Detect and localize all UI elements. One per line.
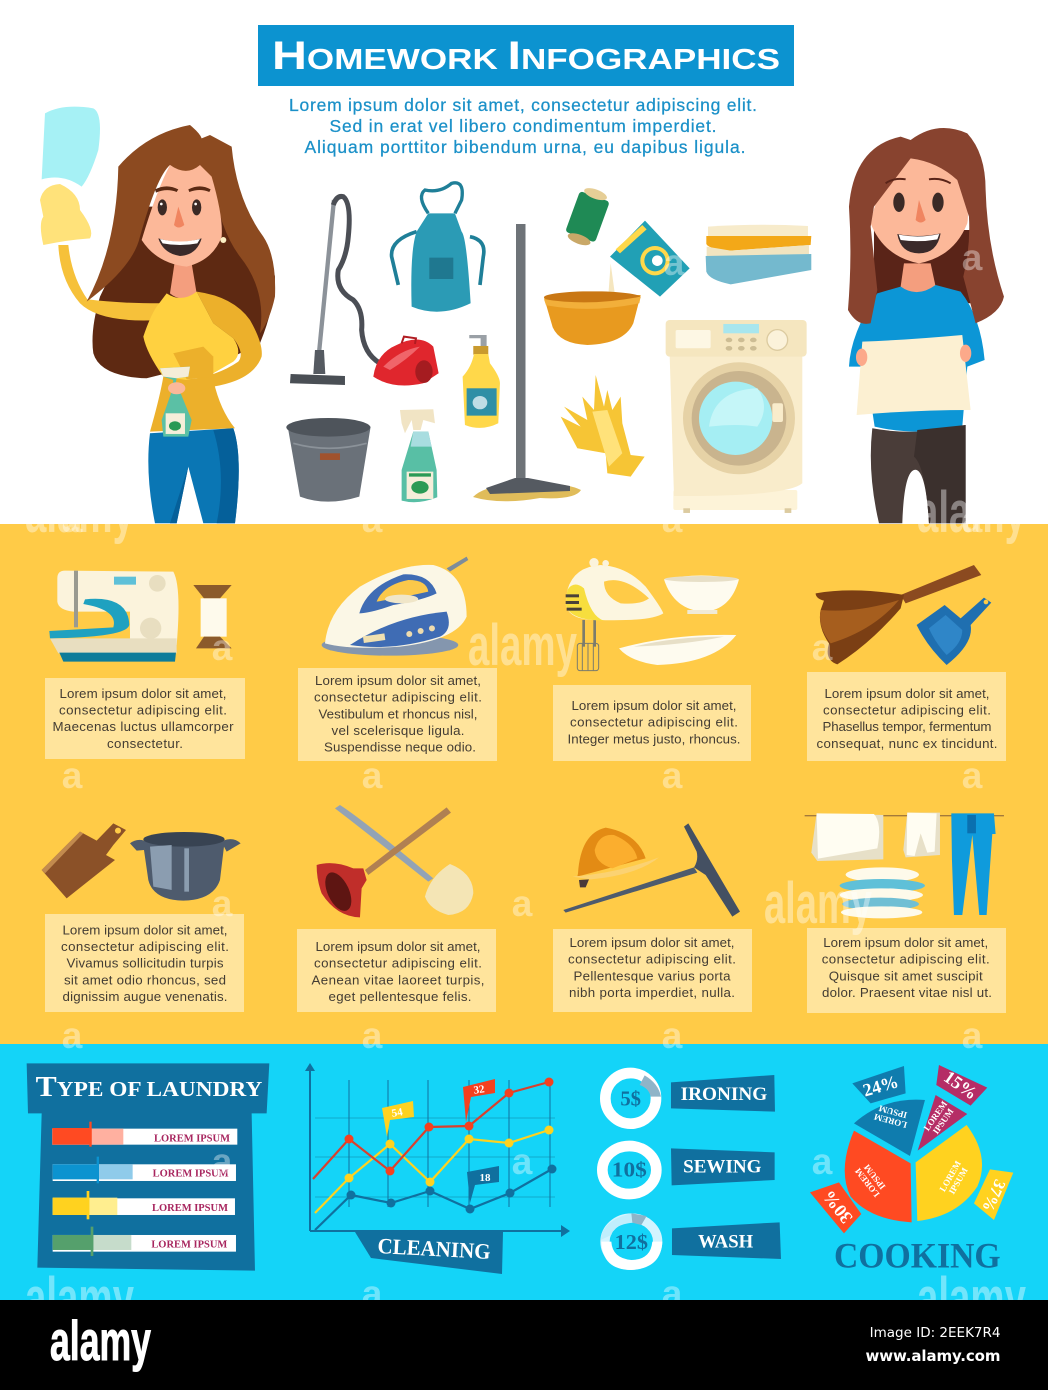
text box: ironing — [298, 668, 497, 761]
watermarks: a — [212, 627, 233, 668]
watermarks: a — [962, 755, 983, 796]
flag: 18: 18 — [480, 1172, 491, 1184]
chart: cooking pie — [810, 1065, 1013, 1276]
text box: ironing: Vestibulum et rhoncus nisl, — [318, 706, 478, 721]
text box: plumbing: Lorem ipsum dolor sit amet, — [316, 939, 480, 954]
watermarks: a — [812, 1141, 833, 1182]
panel item: mixer and dishes — [566, 558, 739, 671]
icon: soap bottle — [463, 335, 500, 428]
icon: metal bucket — [286, 418, 371, 502]
footer logo: alamy — [50, 1309, 151, 1372]
illustration: woman holding towel — [848, 128, 1004, 523]
watermarks: a — [662, 755, 683, 796]
label: sewing — [671, 1148, 775, 1185]
text box: laundry: consectetur adipiscing elit. — [822, 952, 990, 967]
slice: blue 24%: LOREM — [872, 1111, 908, 1130]
flag: 54: 54 — [391, 1106, 404, 1120]
watermarks: a — [662, 499, 683, 540]
slice: yellow 37% — [916, 1125, 982, 1221]
bar: blue — [53, 1157, 236, 1183]
tag: 37% — [974, 1169, 1013, 1220]
slice: red 30% — [845, 1131, 912, 1222]
label: sewing: SEWING — [683, 1157, 761, 1178]
panel item: plunger, needle and brush — [317, 805, 473, 917]
text box: ironing: Lorem ipsum dolor sit amet, — [315, 673, 481, 688]
text box: cooking tools: consectetur adipiscing elit. — [570, 715, 738, 730]
panel item: hard hat and squeegee — [563, 823, 740, 917]
flag: 18 — [467, 1166, 499, 1203]
watermarks: a — [664, 242, 685, 283]
text box: sewing: Lorem ipsum dolor sit amet, — [60, 686, 226, 701]
intro text — [289, 95, 757, 157]
slice: crimson 15% — [918, 1095, 967, 1151]
watermarks: a — [362, 1015, 383, 1056]
text box: plumbing — [297, 929, 496, 1012]
icon: floor mop — [473, 224, 581, 501]
illustration: laundry supplies group — [544, 184, 811, 513]
slice: crimson 15%: IPSUM — [931, 1106, 956, 1136]
text box: cooking tools — [553, 685, 751, 761]
text box: kitchen: sit amet odio rhoncus, sed — [64, 972, 226, 987]
label: wash: WASH — [698, 1231, 753, 1252]
panel item: sewing machine — [49, 571, 232, 662]
text box: plumbing: eget pellentesque felis. — [328, 989, 472, 1004]
ring: wash 12$: 12$ — [615, 1232, 648, 1254]
panel: tools and household tasks — [0, 524, 1048, 1044]
intro text: Lorem ipsum dolor sit amet, consectetur adipiscing elit. — [289, 95, 757, 115]
watermarks: alamy — [25, 480, 134, 545]
icon: apron — [392, 183, 484, 312]
text box: plumbing: consectetur adipiscing elit. — [314, 956, 482, 971]
watermarks: a — [812, 627, 833, 668]
slice: red 30%: IPSUM — [861, 1162, 887, 1191]
watermarks: a — [512, 883, 533, 924]
slice: blue 24%: IPSUM — [877, 1103, 908, 1120]
watermarks: a — [512, 1141, 533, 1182]
icon: vacuum cleaner — [290, 196, 439, 386]
watermarks: alamy — [468, 613, 577, 678]
icon: green thread spool — [563, 184, 612, 249]
icon: laundry detergent box — [610, 221, 690, 297]
bar: green: LOREM IPSUM — [151, 1238, 228, 1250]
text box: sweeping — [807, 672, 1006, 761]
text box: sewing — [45, 678, 245, 759]
panel item: clothesline and stacked linen — [805, 813, 1004, 918]
bar: red — [52, 1122, 237, 1147]
text box: cooking tools: Integer metus justo, rhoncus. — [568, 731, 740, 746]
flag: 32: 32 — [473, 1083, 486, 1097]
chart: type of laundry bars — [27, 1063, 269, 1271]
text box: kitchen — [45, 914, 244, 1012]
watermarks: a — [962, 1015, 983, 1056]
panel item: broom and dustpan — [816, 565, 991, 665]
watermarks — [25, 237, 1026, 1331]
tag: 30%: 30% — [818, 1187, 856, 1227]
icon: rubber gloves — [561, 375, 645, 477]
watermarks: a — [62, 1015, 83, 1056]
ring: sewing 10$: 10$ — [612, 1160, 647, 1182]
tag: 24% — [852, 1066, 906, 1103]
text box: sewing: Maecenas luctus ullamcorper — [52, 719, 234, 734]
label: ironing — [671, 1075, 775, 1112]
text box: sewing: consectetur. — [107, 736, 183, 751]
slice: red 30%: LOREM — [853, 1166, 882, 1199]
watermarks: a — [662, 1015, 683, 1056]
text box: kitchen: Vivamus sollicitudin turpis — [66, 956, 224, 971]
line: red series — [313, 1078, 554, 1179]
watermarks: a — [362, 499, 383, 540]
ring: wash 12$ — [601, 1213, 662, 1270]
illustration: woman cleaning with duster — [40, 107, 275, 523]
ring: ironing 5$: 5$ — [620, 1089, 641, 1111]
text box: kitchen: Lorem ipsum dolor sit amet, — [62, 922, 228, 937]
footer image id: Image ID: 2EEK7R4 — [870, 1325, 1000, 1341]
bar: yellow: LOREM IPSUM — [152, 1202, 229, 1214]
text box: windows — [553, 929, 752, 1012]
ring: sewing 10$ — [602, 1146, 656, 1194]
text box: laundry — [807, 928, 1006, 1013]
watermarks: a — [62, 755, 83, 796]
panel: statistics charts — [0, 1044, 1048, 1300]
text box: ironing: Suspendisse neque odio. — [324, 740, 476, 755]
icon: washing machine — [666, 320, 807, 513]
title banner — [258, 25, 794, 86]
tag: 15%: 15% — [940, 1067, 981, 1104]
text box: laundry: Lorem ipsum dolor sit amet, — [823, 935, 988, 950]
text box: sewing: consectetur adipiscing elit. — [59, 702, 227, 718]
text box: cooking tools: Lorem ipsum dolor sit amet, — [572, 698, 736, 713]
text box: laundry: dolor. Praesent vitae nisl ut. — [822, 985, 992, 1000]
label: ironing: IRONING — [681, 1084, 767, 1105]
text box: kitchen: consectetur adipiscing elit. — [61, 939, 229, 954]
text box: sweeping: consequat, nunc ex tincidunt. — [816, 736, 998, 751]
icon: spray bottle — [400, 409, 437, 502]
title banner: HOMEWORK INFOGRAPHICS — [272, 34, 780, 78]
text box: ironing: consectetur adipiscing elit. — [314, 690, 482, 705]
slice: crimson 15%: LOREM — [922, 1099, 950, 1133]
text box: sweeping: consectetur adipiscing elit. — [823, 702, 991, 718]
flag: 54 — [382, 1101, 414, 1137]
label: cleaning — [355, 1232, 503, 1274]
watermarks: a — [212, 1141, 233, 1182]
text box: laundry: Quisque sit amet suscipit — [829, 968, 983, 983]
footer url: www.alamy.com — [866, 1347, 1000, 1365]
heading: type of laundry: TYPE OF LAUNDRY — [36, 1072, 262, 1103]
watermarks: alamy — [25, 1266, 134, 1331]
watermarks: a — [212, 883, 233, 924]
watermarks: a — [962, 499, 983, 540]
text box: kitchen: dignissim augue venenatis. — [62, 989, 228, 1004]
label: cooking: COOKING — [834, 1236, 1001, 1276]
illustration: cleaning supplies group — [286, 183, 500, 502]
chart: cleaning line chart — [305, 1063, 570, 1274]
intro text: Aliquam porttitor bibendum urna, eu dapibus ligula. — [304, 137, 746, 157]
text box: windows: nibh porta imperdiet, nulla. — [569, 985, 735, 1000]
watermarks: a — [362, 1273, 383, 1314]
label: cleaning: CLEANING — [377, 1233, 491, 1264]
text box: windows: consectetur adipiscing elit. — [568, 952, 736, 967]
text box: windows: Pellentesque varius porta — [574, 968, 731, 983]
slice: yellow 37%: LOREM — [937, 1159, 963, 1193]
bar: green — [53, 1227, 236, 1256]
slice: yellow 37%: IPSUM — [947, 1165, 970, 1196]
icon: powder stream and basin — [544, 263, 641, 345]
panel item: cutting board and pot — [42, 823, 241, 901]
line: blue series — [315, 1164, 556, 1230]
slice: blue 24% — [854, 1100, 925, 1156]
bar: blue: LOREM IPSUM — [153, 1168, 229, 1180]
bar: yellow — [53, 1191, 235, 1219]
icon: folded towels — [706, 225, 811, 284]
bar: red: LOREM IPSUM — [154, 1133, 231, 1145]
watermarks: a — [362, 755, 383, 796]
panel item: steam iron — [322, 557, 468, 656]
text box: ironing: vel scelerisque ligula. — [332, 723, 464, 738]
line: yellow series — [315, 1126, 554, 1213]
watermarks: alamy — [764, 871, 872, 936]
watermarks: a — [662, 1273, 683, 1314]
tag: 37%: 37% — [978, 1177, 1010, 1215]
flag: 32 — [463, 1079, 495, 1122]
tag: 24%: 24% — [861, 1071, 901, 1100]
tag: 30% — [810, 1182, 861, 1233]
watermarks: a — [962, 237, 983, 278]
intro text: Sed in erat vel libero condimentum imperdiet. — [330, 116, 716, 136]
ring: ironing 5$ — [605, 1073, 661, 1124]
text box: sweeping: Lorem ipsum dolor sit amet, — [824, 686, 990, 701]
cost rings and labels — [601, 1073, 781, 1270]
label: wash — [672, 1222, 781, 1259]
text box: plumbing: Aenean vitae laoreet turpis, — [312, 972, 484, 987]
text box: sweeping: Phasellus tempor, fermentum — [822, 719, 992, 734]
watermarks: a — [62, 499, 83, 540]
footer bar — [0, 1300, 1048, 1390]
text box: windows: Lorem ipsum dolor sit amet, — [570, 935, 734, 950]
